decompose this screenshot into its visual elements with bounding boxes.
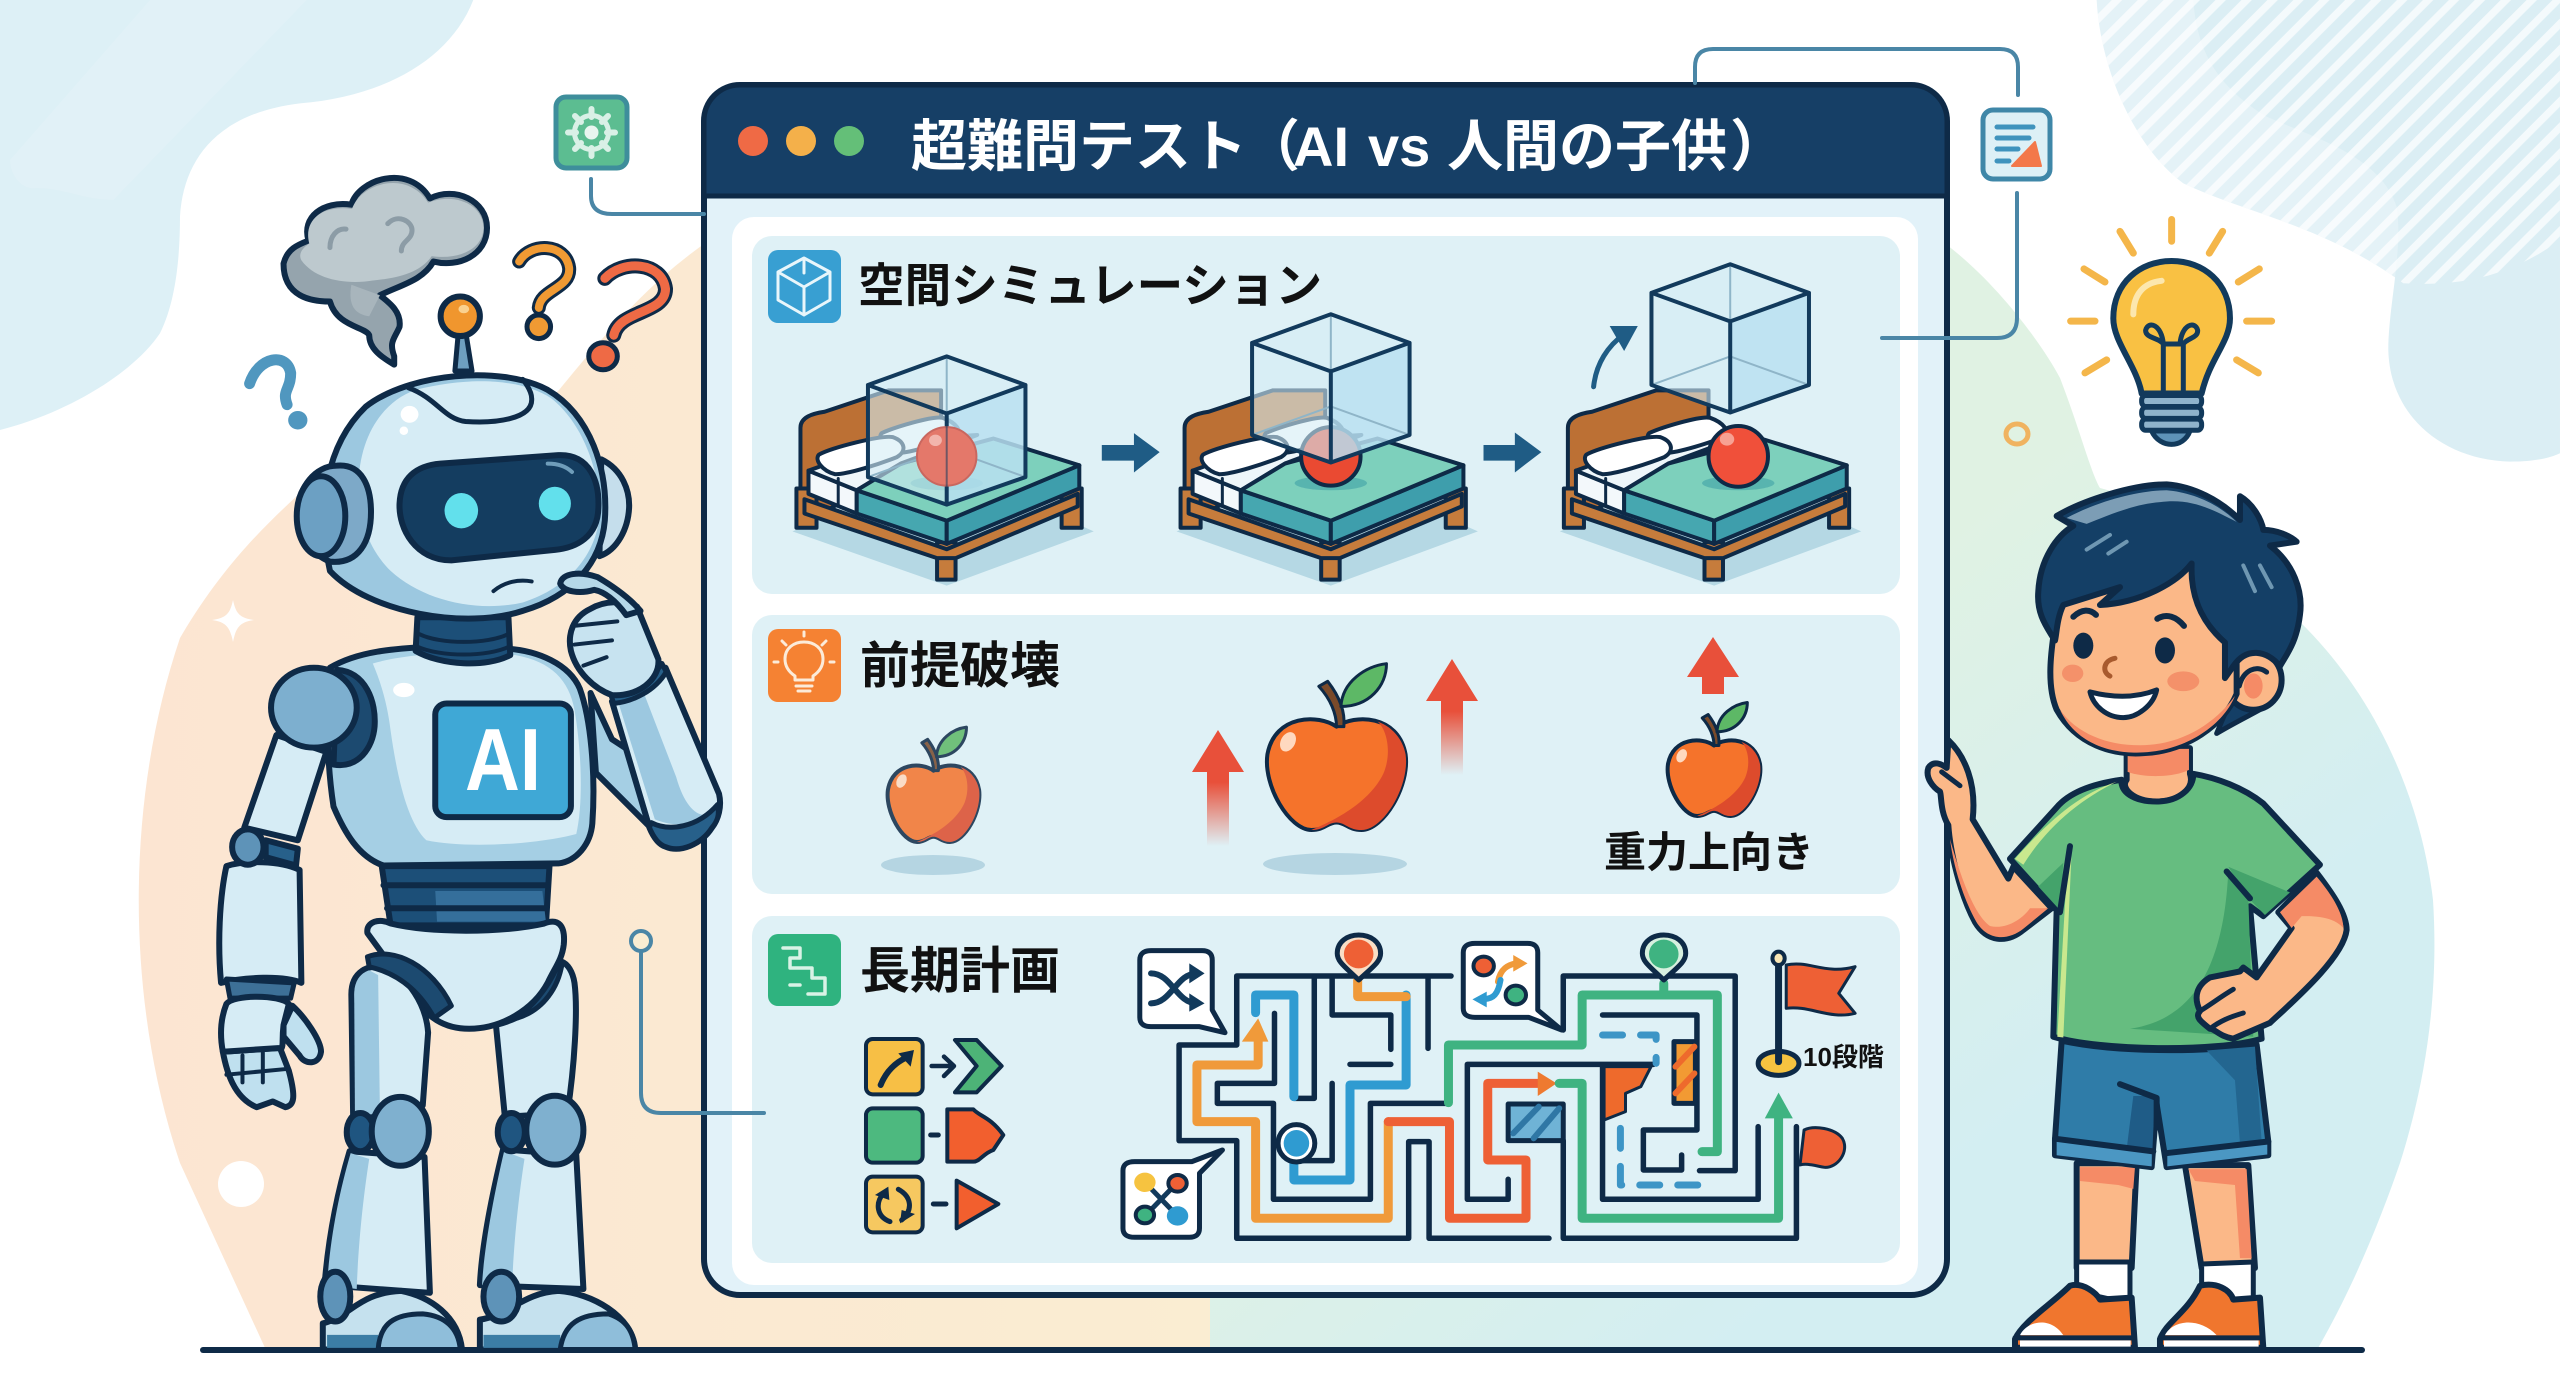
blue route [1256, 995, 1406, 1180]
left ear [297, 466, 371, 562]
question mark: blue [250, 360, 307, 429]
ear [2217, 650, 2282, 733]
maze diagram [1123, 935, 1855, 1238]
cheeks [2062, 665, 2199, 691]
light rays [2071, 220, 2272, 373]
window body [704, 85, 1947, 1295]
maze walls [1179, 976, 1796, 1238]
lower legs [325, 1149, 583, 1293]
icon: cube [768, 250, 841, 323]
legend row 2 [866, 1108, 1003, 1163]
background blob: right green and blue [1210, 240, 2434, 1350]
face [2050, 559, 2237, 753]
decoration: white sparkle and dot [212, 600, 264, 1207]
AI chest label: AI [465, 710, 541, 809]
speech bubble: shuffle [1140, 951, 1225, 1033]
hatched blocks [1508, 1042, 1695, 1141]
neck [2125, 748, 2191, 802]
arrow 1 [1102, 433, 1160, 472]
title: ） [1730, 115, 1786, 178]
robot character [219, 178, 720, 1349]
pin: green [1642, 935, 1686, 980]
title: 人間の子供 [1447, 115, 1727, 178]
mouth [493, 581, 532, 591]
torso [328, 647, 593, 866]
forearm [610, 663, 720, 849]
boy head [2038, 484, 2301, 753]
eyes and brows [2073, 611, 2184, 663]
background blob: left peach [139, 240, 1210, 1350]
heading: 長期計画 [860, 943, 1060, 999]
arrow 2 [1484, 432, 1541, 472]
connector: document icon to window [1882, 193, 2017, 338]
left arm raised with hand [1928, 740, 2052, 939]
left shoulder [271, 668, 375, 765]
robot upper body [232, 178, 720, 866]
orange route [1197, 980, 1406, 1218]
legend: step icons [866, 1039, 1003, 1232]
icon: gear tile [556, 97, 627, 168]
pelvis [367, 921, 564, 1029]
AI chest plate [435, 703, 571, 817]
apple 2 large with shadow [1263, 664, 1407, 875]
right upper arm [591, 693, 716, 832]
robot lower body [219, 862, 635, 1349]
window header bar [704, 85, 1947, 196]
illustration: bed scenes [792, 264, 1861, 586]
bed 1 with box over ball [792, 356, 1094, 586]
question mark: orange [519, 248, 569, 339]
legend row 3 [866, 1177, 998, 1232]
title: vs [1368, 115, 1430, 178]
left elbow [232, 829, 298, 866]
bed 3 with box removed [1560, 264, 1861, 586]
left arm lower [219, 862, 321, 1107]
icon: route [768, 934, 841, 1006]
hair [2038, 484, 2301, 678]
question mark: red [589, 266, 666, 370]
decoration: orange ring [2006, 424, 2028, 444]
right ear [599, 459, 629, 556]
title: （ [1244, 115, 1300, 178]
card background [752, 916, 1900, 1263]
title: 超難問テスト [911, 115, 1247, 178]
connector: window to node [631, 931, 764, 1113]
shirt [2010, 774, 2320, 1048]
screw base [2142, 395, 2202, 444]
icon: document tile [1983, 110, 2050, 179]
icon: lightbulb [768, 629, 841, 702]
background blob: top right striped [2097, 0, 2560, 462]
label: gravity upward: 重力上向き [1604, 829, 1814, 876]
thought cloud [284, 178, 487, 365]
left upper arm [244, 735, 326, 840]
panel: long-term planning [752, 916, 1900, 1263]
curved lift arrow [1594, 326, 1638, 387]
apple 1 faded with shadow [881, 727, 985, 875]
feet [320, 1272, 635, 1349]
bulb glass [2113, 261, 2230, 393]
socks [2077, 1262, 2253, 1304]
filament [2146, 325, 2198, 393]
boy character [1928, 484, 2347, 1348]
second flag [1796, 1127, 1845, 1190]
left thigh [351, 954, 451, 1117]
waist [382, 866, 549, 925]
antenna [441, 296, 480, 371]
card background [752, 236, 1900, 594]
connector: gear to window [591, 179, 704, 214]
heading: 前提破壊 [860, 638, 1060, 694]
cheek shadow [2060, 696, 2235, 753]
inner white panel [732, 217, 1918, 1285]
bed 2 with lifted box [1177, 314, 1478, 586]
label: ten steps: 10段階 [1803, 1042, 1884, 1072]
window control dots [738, 126, 864, 156]
nose [2105, 658, 2115, 676]
red up arrow [1687, 637, 1739, 694]
red route [1388, 1083, 1539, 1218]
neck [416, 617, 510, 663]
right arm on hip [2197, 873, 2347, 1039]
boy body [1928, 740, 2347, 1348]
legs [2077, 1163, 2255, 1268]
visor [400, 455, 598, 560]
speech bubble: nodes and arrows [1463, 943, 1562, 1030]
red rising arrow left [1192, 730, 1244, 846]
red rising arrow right [1426, 659, 1478, 775]
right thigh [496, 962, 576, 1117]
panel: test window [704, 85, 1947, 1295]
eyes [445, 487, 571, 528]
card background [752, 615, 1900, 894]
connector: window top to document icon [1695, 49, 2018, 95]
green route [1448, 983, 1779, 1218]
shorts [2055, 1041, 2268, 1167]
heading: 空間シミュレーション [858, 260, 1322, 312]
title: AI [1293, 115, 1349, 178]
hand with finger on chin [560, 574, 658, 695]
goal flag with base [1758, 952, 1855, 1075]
apple 3 small [1668, 702, 1760, 816]
smile [2090, 690, 2157, 718]
speech bubble: network [1123, 1150, 1222, 1237]
panel: premise breaking [752, 615, 1900, 894]
dashed route [1603, 1035, 1699, 1185]
shoes [2015, 1285, 2263, 1348]
pin: orange [1337, 935, 1381, 980]
icon: idea lightbulb [2071, 220, 2272, 444]
legend row 1 [866, 1039, 1002, 1094]
ground line [203, 1347, 2362, 1353]
head [324, 375, 605, 619]
start marker [1278, 1125, 1315, 1162]
panel: spatial simulation [752, 236, 1900, 594]
knees [347, 1096, 583, 1166]
background blob: top left [0, 0, 473, 430]
